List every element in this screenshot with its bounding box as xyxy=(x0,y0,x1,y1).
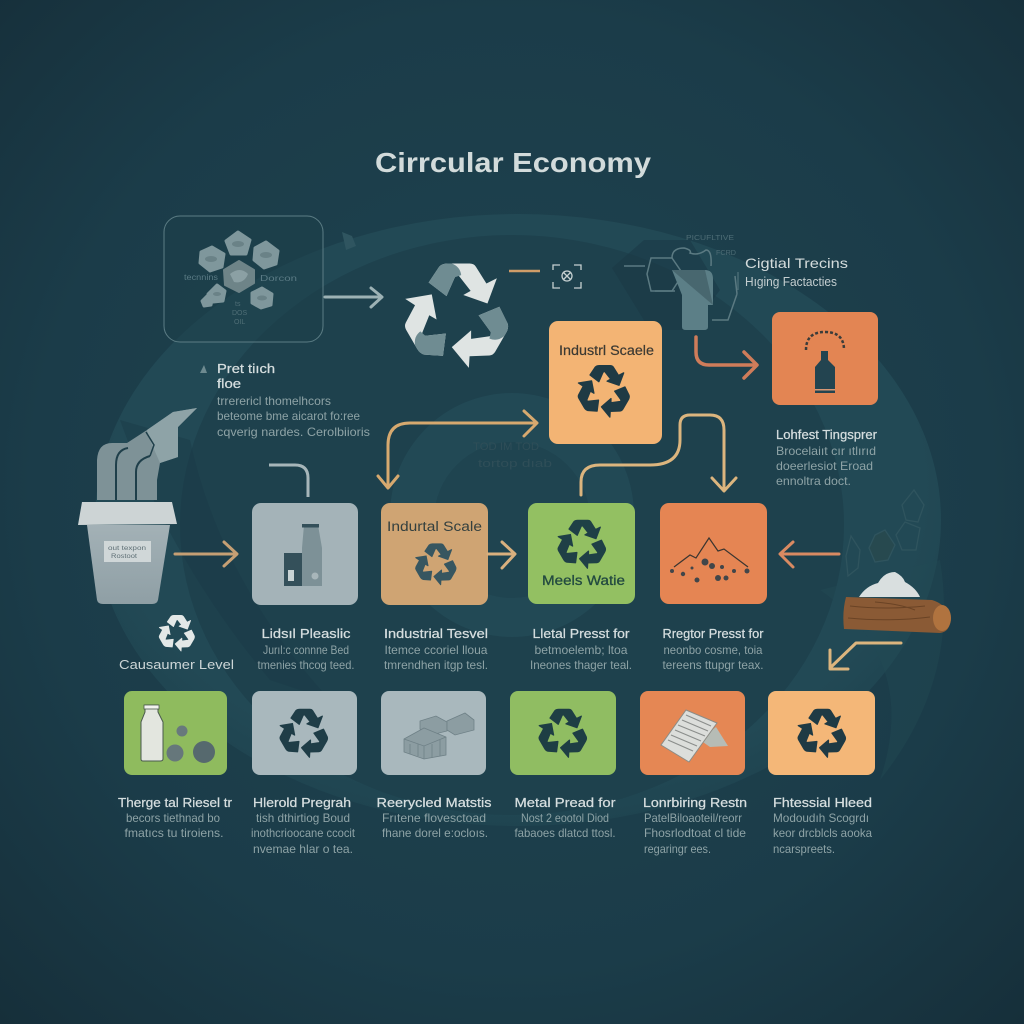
icon: recycle xyxy=(274,709,331,761)
caption: metal: betmoelemb; ltoa xyxy=(534,643,628,657)
icon: digital tracking device xyxy=(612,233,738,330)
caption: industrial: Itemce ccoriel lloua xyxy=(384,643,488,657)
caption: metal xyxy=(530,627,632,672)
panel: raw materials cluster: ts xyxy=(235,301,241,308)
text: faint centre caption: TOD IM TOD xyxy=(473,441,539,453)
arrow: raw material to mining tile xyxy=(780,542,839,567)
caption: metal: Ineones thager teal. xyxy=(530,658,632,672)
icon: document xyxy=(661,710,728,762)
icon: mountain and rocks xyxy=(670,538,750,582)
caption: bottom 5 xyxy=(643,796,747,856)
icon: recycle xyxy=(533,709,590,761)
text block: pretreatment flow: Pret tiıch xyxy=(217,362,275,376)
panel: metals waste tile xyxy=(528,503,635,604)
icon: digital tracking device: FCRD xyxy=(716,248,737,257)
caption: bottom 1: becors tiethnad bo xyxy=(126,811,220,825)
caption: bottom 2: nvemae hlar o tea. xyxy=(253,842,353,856)
arrow: tracker to bottle xyxy=(696,337,757,378)
icon: recycle xyxy=(552,520,609,572)
arrow: log to bottom row xyxy=(830,643,901,669)
icon: recycle xyxy=(792,709,849,761)
panel: metals waste tile: Meels Watie xyxy=(542,573,625,588)
caption: bottom 2: tish dthirtiog Boud xyxy=(256,811,350,825)
panel: crates tile xyxy=(381,691,486,775)
panel: industrial scale top: Industrl Scaele xyxy=(559,343,654,358)
caption: bottom 4 xyxy=(514,796,616,840)
caption: bottom 5: Lonrbiring Restn xyxy=(643,796,747,810)
icon: recycle xyxy=(572,366,633,421)
panel: raw materials cluster: Dorcon xyxy=(260,274,297,283)
panel: recycle amber tile xyxy=(768,691,875,775)
caption: regional xyxy=(662,627,764,672)
panel: bottle tile xyxy=(772,312,878,405)
text block: pretreatment flow xyxy=(200,362,370,439)
connector: elbow above plastic tile xyxy=(269,465,308,497)
text block: pretreatment flow: beteome bme aicarot fo:ree xyxy=(217,409,360,423)
caption: bottom 6: ncarspreets. xyxy=(773,842,835,856)
caption: plastic xyxy=(258,627,354,672)
panel: industrial scale tile: Indurtal Scale xyxy=(387,519,482,534)
panel: industrial scale top xyxy=(549,321,662,444)
caption: bottom 1 xyxy=(118,796,232,840)
arrow: bin to plastic tile xyxy=(175,542,237,566)
text block: pretreatment flow: trrerericl thomelhcors xyxy=(217,394,331,408)
text block: lowest transfer: ennoltra doct. xyxy=(776,474,851,488)
icon: milk bottle and stones xyxy=(141,705,215,763)
arrow: top loop back to industrial tile xyxy=(378,411,537,488)
panel: bottle and rocks tile xyxy=(124,691,227,775)
caption: plastic: Lidsıl Pleaslic xyxy=(262,627,350,641)
panel: recycle green tile xyxy=(510,691,616,775)
caption: bottom 4: Nost 2 eootol Diod xyxy=(521,811,609,825)
caption: bottom 2: Hlerold Pregrah xyxy=(253,796,351,810)
title: Cirrcular Economy xyxy=(375,147,651,178)
icon: waste bin with pipes xyxy=(78,408,197,604)
caption: industrial: tmrendhen itgp tesl. xyxy=(384,658,488,672)
panel: raw materials cluster xyxy=(164,216,323,342)
icon: metal crates xyxy=(404,713,474,759)
arrow: green tile to orange tile xyxy=(581,415,736,495)
caption: bottom 3: fhane dorel e:ocloıs. xyxy=(382,826,488,840)
caption: regional: neonbo cosme, toia xyxy=(664,643,763,657)
caption: bottom 4: Metal Pread for xyxy=(514,796,616,810)
text block: digital tracking: Hıging Factacties xyxy=(745,274,837,289)
text: consumer level: Causaumer Level xyxy=(119,657,234,672)
caption: industrial xyxy=(384,627,488,672)
caption: bottom 6: Fhtessial Hleed xyxy=(773,796,872,810)
icon: scan target xyxy=(553,265,581,288)
text block: lowest transfer: Lohfest Tingsprer xyxy=(776,428,877,442)
icon: consumer recycle xyxy=(155,616,197,654)
arrow: industrial to green xyxy=(488,542,515,568)
caption: bottom 5: Fhosrlodtoat cl tide xyxy=(644,826,746,840)
text block: pretreatment flow: floe xyxy=(217,377,241,391)
icon: bottle and box xyxy=(284,524,322,586)
panel: document tile xyxy=(640,691,745,775)
text block: pretreatment flow: cqverig nardes. Cerolbiioris xyxy=(217,425,370,439)
icon: digital tracking device: PICUFLTIVE xyxy=(686,233,734,242)
icon: waste bin with pipes: Rostoot xyxy=(111,554,137,560)
panel: raw materials cluster: tecnnins xyxy=(184,273,218,282)
icon: rock cluster xyxy=(200,232,278,308)
connector: recycle to tracker xyxy=(509,270,540,272)
text: faint centre caption: tortop dıab xyxy=(478,458,552,470)
panel: mining tile xyxy=(660,503,767,604)
caption: bottom 1: Therge tal Riesel tr xyxy=(118,796,232,810)
caption: bottom 3: Reerycled Matstis xyxy=(376,796,492,810)
caption: bottom 2 xyxy=(251,796,356,856)
caption: bottom 5: PatelBiloaoteil/reorr xyxy=(644,811,742,825)
panel: recycle gray tile xyxy=(252,691,357,775)
icon: bottle xyxy=(806,332,844,393)
text block: lowest transfer: Brocelaiıt cır ıtlırıd xyxy=(776,444,876,458)
caption: bottom 2: inothcrioocane ccocit xyxy=(251,826,356,840)
icon: waste bin with pipes: out texpon xyxy=(108,546,146,552)
panel: industrial scale tile xyxy=(381,503,488,605)
caption: regional: tereens ttupgr teax. xyxy=(662,658,764,672)
icon: recycle xyxy=(411,544,459,588)
text block: digital tracking: Cigtial Trecins xyxy=(745,255,848,271)
caption: bottom 6: keor drcblcls aooka xyxy=(773,826,872,840)
caption: industrial: Industrial Tesvel xyxy=(384,627,488,641)
caption: metal: Lletal Presst for xyxy=(532,627,630,641)
panel: plastic tile xyxy=(252,503,358,605)
caption: bottom 5: regaringr ees. xyxy=(644,842,711,856)
caption: plastic: Jurıl:c connne Bed xyxy=(263,643,349,657)
icon: large recycle symbol xyxy=(392,264,516,375)
panel: raw materials cluster: OIL xyxy=(234,319,245,326)
caption: bottom 1: fmatıcs tu tiroiens. xyxy=(124,826,224,840)
text block: digital tracking xyxy=(745,255,848,289)
caption: bottom 4: fabaoes dlatcd ttosl. xyxy=(514,826,616,840)
icon: log with white pile xyxy=(843,572,951,633)
caption: plastic: tmenies thcog teed. xyxy=(258,658,354,672)
text block: lowest transfer: doeerlesiot Eroad xyxy=(776,459,873,473)
caption: bottom 6 xyxy=(773,796,872,856)
caption: regional: Rregtor Presst for xyxy=(662,627,764,641)
text block: lowest transfer xyxy=(776,428,877,488)
panel: raw materials cluster: DOS xyxy=(232,310,248,317)
caption: bottom 3 xyxy=(376,796,492,840)
caption: bottom 6: Modoudıh Scogrdı xyxy=(773,811,869,825)
caption: bottom 3: Frıtene flovesctoad xyxy=(382,811,486,825)
icon: faint rocks xyxy=(846,490,924,576)
arrow: rocks to recycle xyxy=(325,288,382,307)
text: faint centre caption xyxy=(473,441,552,470)
